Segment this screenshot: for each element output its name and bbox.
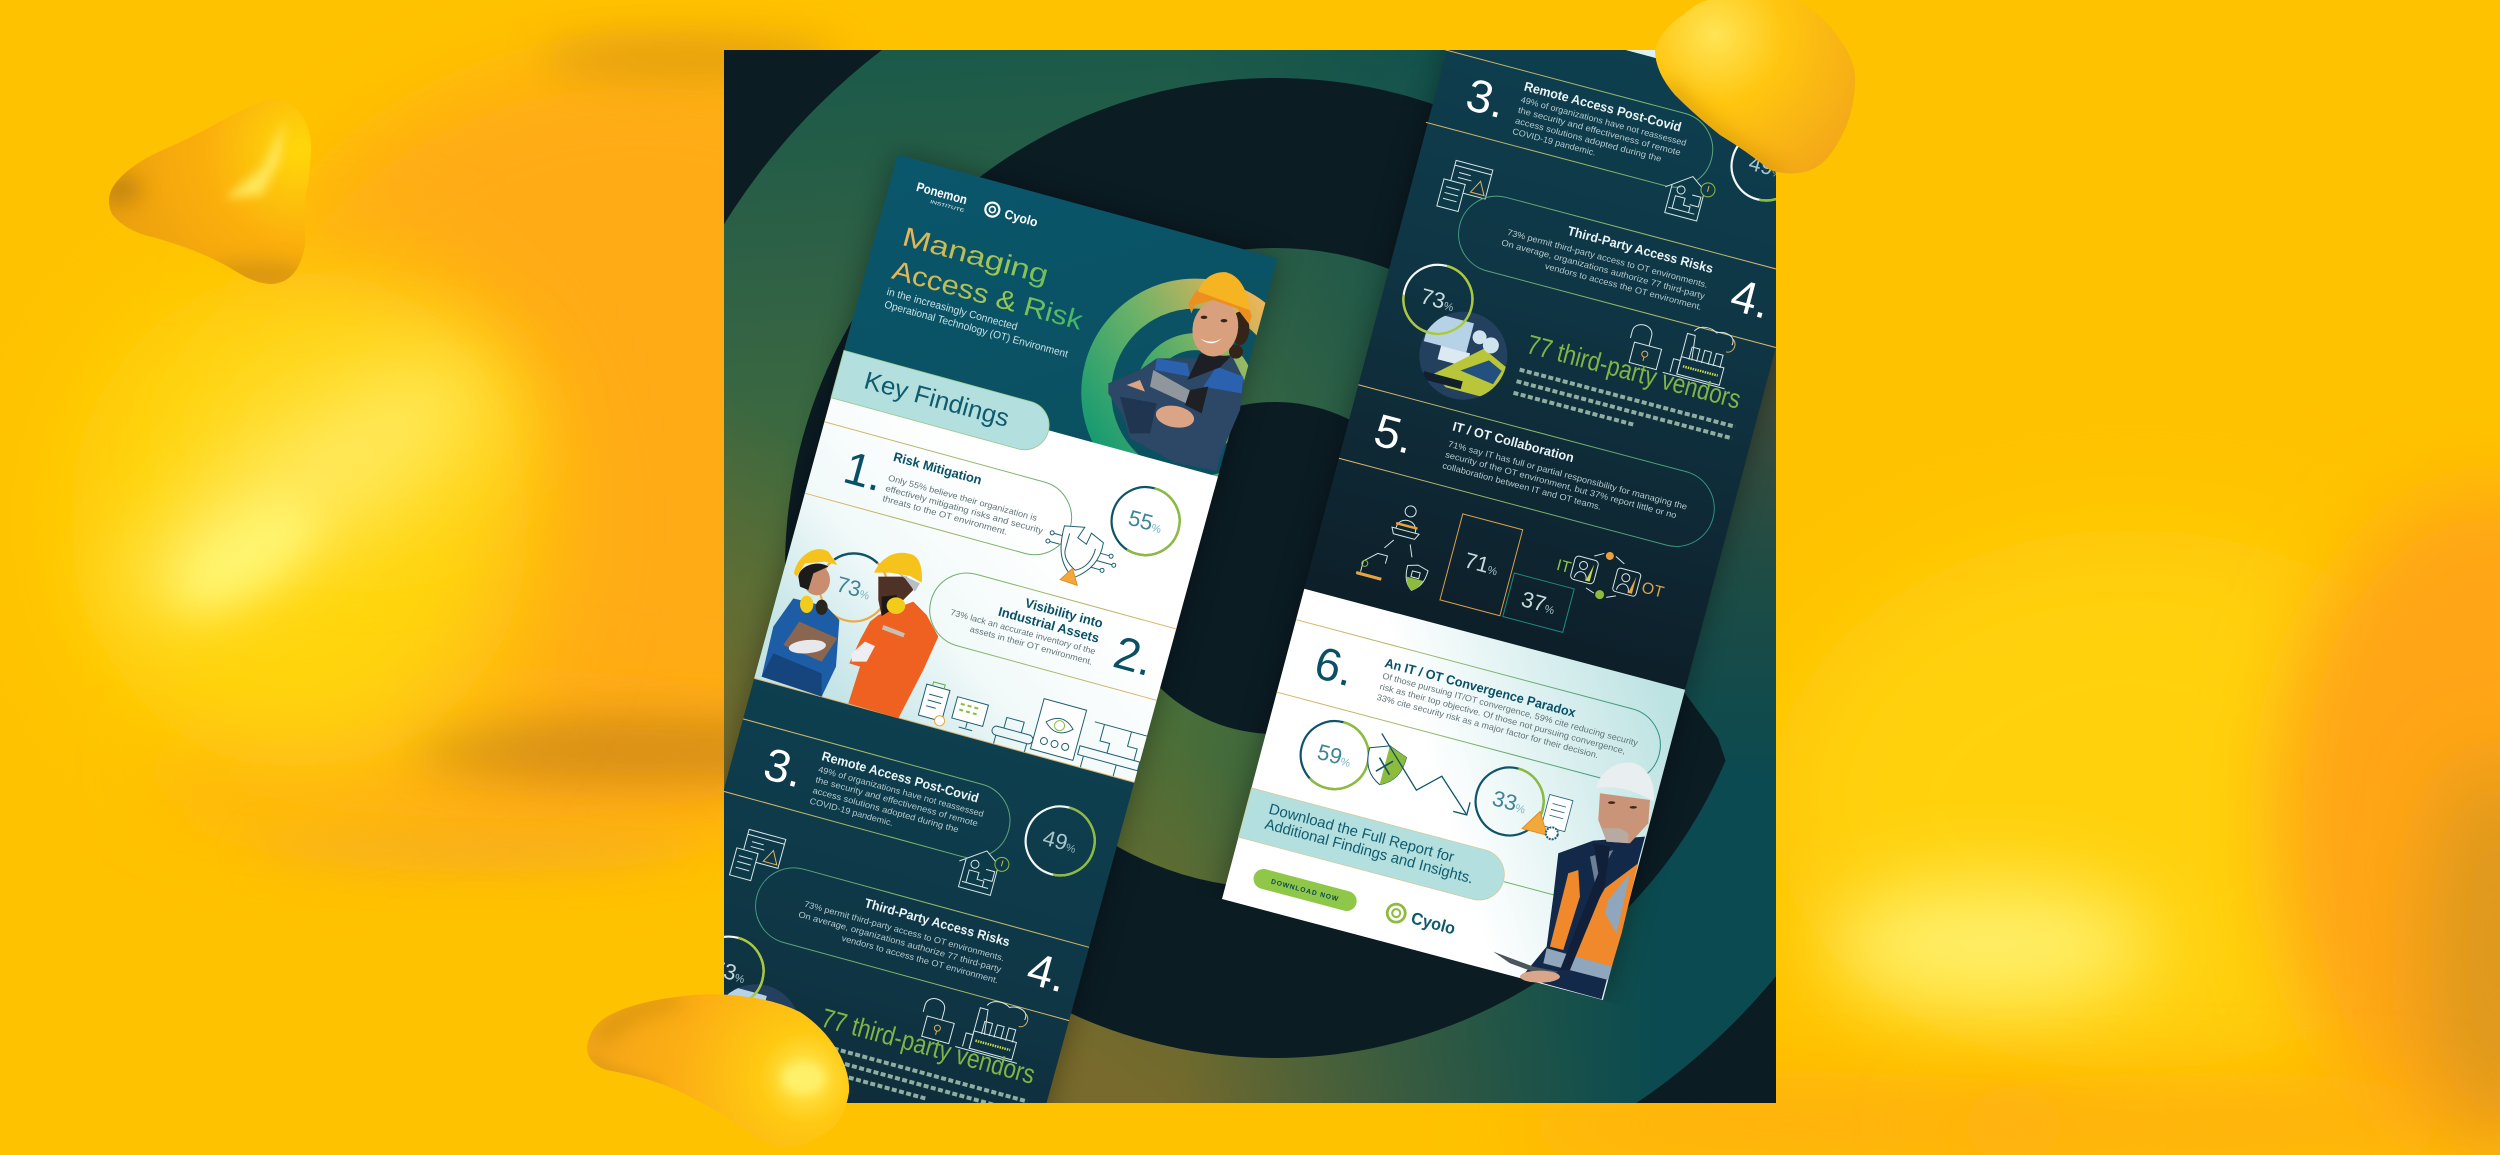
finding 6: convergence paradox: 6. — [1309, 636, 1360, 696]
stat ring: 73%: 73% — [834, 571, 874, 605]
icon: factory — [955, 994, 1031, 1063]
white findings section — [754, 373, 1218, 782]
finding 6: convergence paradox: Of those pursuing IT/OT convergence, 59% cite reducing security — [1381, 671, 1640, 748]
stat ring: 59%: 59% — [1315, 739, 1355, 772]
logo: Ponemon Institute: Ponemon — [915, 179, 969, 207]
stat ring: 73% — [795, 529, 913, 646]
icons: clipboard, monitor and production line — [916, 668, 1149, 782]
finding 5: IT / OT collaboration: collaboration between IT and OT teams. — [1441, 460, 1602, 512]
icon: broken shield — [1037, 518, 1123, 594]
icon: open padlock — [917, 996, 959, 1044]
callout: 77 third-party vendors: 77 third-party vendors — [818, 1003, 1038, 1090]
button: download now — [1251, 867, 1359, 913]
stat ring: 49%: 49% — [1040, 825, 1080, 858]
finding 1: risk mitigation — [805, 422, 1080, 563]
finding 3: remote access: access solutions adopted during the — [812, 785, 960, 835]
finding 5: IT / OT collaboration — [1339, 385, 1723, 555]
finding 1: risk mitigation: Risk Mitigation — [892, 449, 984, 488]
download banner: Download the Full Report for — [1267, 801, 1456, 866]
logo: Cyolo: Cyolo — [1409, 909, 1457, 938]
download banner: Additional Findings and Insights. — [1263, 816, 1475, 887]
finding 4: third-party risks: 73% permit third-party access to OT environments. — [1506, 227, 1709, 290]
finding 4: third-party risks: 73% permit third-party access to OT environments. — [803, 899, 1006, 963]
finding 3: remote access: the security and effectiveness of remote — [814, 774, 979, 828]
header rings — [1081, 278, 1266, 490]
finding 2: visibility: Industrial Assets — [997, 604, 1101, 646]
stat ring: 33%: 33% — [1490, 785, 1529, 818]
stat ring: 73% vendors — [1396, 257, 1480, 341]
callout: 77 third-party vendors: 77 third-party vendors — [1524, 329, 1744, 415]
title: Access & Risk — [889, 255, 1087, 336]
finding 3: remote access — [1426, 50, 1721, 195]
stat box: 71%: 71% — [1462, 547, 1502, 580]
finding 1: risk mitigation: Only 55% believe their organization is — [887, 473, 1038, 523]
vendor icon rows — [1513, 370, 1735, 450]
title: Managing — [899, 222, 1052, 290]
logo: Cyolo — [984, 202, 1037, 226]
stat ring: 49% — [1018, 799, 1103, 883]
finding 3: remote access: Remote Access Post-Covid — [1523, 79, 1683, 135]
finding 3: remote access: 3. — [1461, 68, 1512, 128]
stat ring: 55%: 55% — [1126, 505, 1166, 538]
photo: control room — [702, 974, 810, 1083]
white final section — [1222, 589, 1685, 1000]
finding 4: third-party risks: vendors to access the OT environment. — [841, 933, 999, 985]
workers: two engineers talking — [762, 549, 938, 718]
finding 2: visibility: Visibility into — [1023, 595, 1105, 631]
stat box: 71% — [1440, 514, 1523, 616]
dark findings section — [624, 678, 1134, 1155]
stat ring: 49% — [1724, 124, 1808, 208]
white top strip — [1459, 0, 1866, 107]
worker: woman with radio — [1108, 272, 1252, 471]
finding 4: third-party risks: Third-Party Access Risks — [863, 895, 1012, 949]
finding 4: third-party risks — [1450, 188, 1795, 348]
finding 1: risk mitigation: threats to the OT environment. — [882, 493, 1009, 537]
finding 3: remote access: 49% of organizations have not reassessed — [817, 764, 985, 819]
finding 4: third-party risks: On average, organizations authorize 77 third-party — [797, 909, 1003, 974]
icon: home office — [1659, 170, 1717, 224]
stat ring: 73% vendors — [687, 929, 771, 1014]
icon: warning checklist and gear — [1521, 790, 1573, 842]
stat ring: 73% vendors: 73% — [709, 955, 749, 988]
stat ring: 73% vendors: 73% — [1418, 283, 1458, 316]
finding 6: convergence paradox — [1277, 620, 1669, 791]
finding 2: visibility: 2. — [1108, 626, 1159, 686]
finding 3: remote access: COVID-19 pandemic. — [809, 796, 894, 828]
finding 4: third-party risks: 4. — [1022, 942, 1073, 1002]
stat box: 37% — [1503, 573, 1574, 632]
icons: laptop user, robot arm, shield — [1355, 497, 1443, 593]
finding 6: convergence paradox: 33% cite security risk as a major factor for their decision. — [1376, 692, 1600, 760]
finding 5: IT / OT collaboration: 5. — [1369, 404, 1419, 464]
icon: home office — [953, 845, 1011, 898]
finding 3: remote access: Remote Access Post-Covid — [820, 748, 981, 806]
finding 3: remote access: the security and effectiveness of remote — [1517, 105, 1682, 158]
soft glow: left background blur — [56, 18, 834, 880]
left infographic sheet — [724, 151, 1282, 1103]
stat ring: 59% — [1293, 713, 1376, 797]
3D blob: top left — [98, 99, 311, 287]
key findings banner — [831, 350, 1055, 455]
title — [890, 228, 1083, 330]
finding 5: IT / OT collaboration: 71% say IT has full or partial responsibility for managing the — [1447, 439, 1689, 512]
finding 5: IT / OT collaboration: security of the OT environment, but 37% report little or no — [1444, 449, 1678, 520]
stat ring: 49%: 49% — [1746, 150, 1786, 183]
vendor icon rows — [806, 1043, 1027, 1125]
finding 6: convergence paradox: risk as their top objective. Of those not pursuing convergence, — [1379, 681, 1627, 756]
icon: open padlock — [1624, 322, 1666, 370]
dark mockup panel with concentric spiral rings — [724, 50, 1776, 1103]
logo: Ponemon Institute — [916, 182, 966, 212]
photo: control room — [1410, 302, 1517, 410]
finding 3: remote access — [723, 719, 1019, 867]
dark findings section — [1304, 6, 1840, 690]
soft glow: right background blur — [1500, 490, 2500, 1153]
worker: man in hi-vis vest — [1493, 763, 1654, 999]
finding 6: convergence paradox: An IT / OT Convergence Paradox — [1383, 655, 1578, 720]
stat ring: 33% — [1468, 760, 1551, 843]
icon: warning documents — [729, 828, 786, 887]
3D blob: bottom centre — [587, 994, 849, 1147]
finding 2: visibility — [921, 565, 1176, 700]
finding 4: third-party risks — [747, 859, 1089, 1021]
right infographic sheet — [1220, 0, 1866, 1000]
3D blob: top right — [1655, 0, 1855, 178]
diagram: IT and OT exchange — [1551, 540, 1670, 615]
button: download now: DOWNLOAD NOW — [1270, 879, 1340, 903]
finding 3: remote access: 49% of organizations have not reassessed — [1520, 94, 1688, 148]
finding 4: third-party risks: Third-Party Access Risks — [1566, 223, 1715, 276]
finding 2: visibility: 73% lack an accurate inventory of the — [949, 607, 1097, 656]
finding 2: visibility: assets in their OT environment. — [969, 624, 1094, 667]
finding 1: risk mitigation: 1. — [839, 441, 889, 501]
download banner — [1238, 788, 1617, 934]
finding 3: remote access: access solutions adopted during the — [1514, 115, 1663, 164]
logo: Ponemon Institute: INSTITUTE — [930, 199, 965, 213]
icon: shield with cross — [1361, 741, 1408, 789]
finding 4: third-party risks: vendors to access the OT environment. — [1544, 261, 1703, 312]
finding 1: risk mitigation: effectively mitigating risks and security — [884, 483, 1045, 536]
key findings banner: Key Findings — [861, 366, 1012, 433]
subtitle: Operational Technology (OT) Environment — [883, 299, 1069, 360]
logo: Cyolo — [1385, 902, 1457, 938]
header panel — [834, 155, 1278, 490]
stat box: 37%: 37% — [1519, 586, 1558, 619]
diagram: IT and OT exchange: IT — [1555, 557, 1573, 577]
finding 3: remote access: COVID-19 pandemic. — [1511, 126, 1597, 158]
stat ring: 55% — [1104, 479, 1187, 563]
finding 4: third-party risks: 4. — [1726, 268, 1776, 329]
finding 5: IT / OT collaboration: IT / OT Collaboration — [1451, 419, 1576, 465]
finding 4: third-party risks: On average, organizations authorize 77 third-party — [1500, 237, 1707, 301]
subtitle: in the increasingly Connected — [885, 286, 1019, 333]
diagram: IT and OT exchange: OT — [1640, 579, 1666, 602]
icon: factory — [1663, 320, 1739, 389]
finding 3: remote access: 3. — [759, 737, 809, 798]
logo: Cyolo: Cyolo — [1003, 206, 1040, 230]
icon: warning documents — [1437, 159, 1493, 217]
arrow: downward trend — [1367, 733, 1481, 815]
